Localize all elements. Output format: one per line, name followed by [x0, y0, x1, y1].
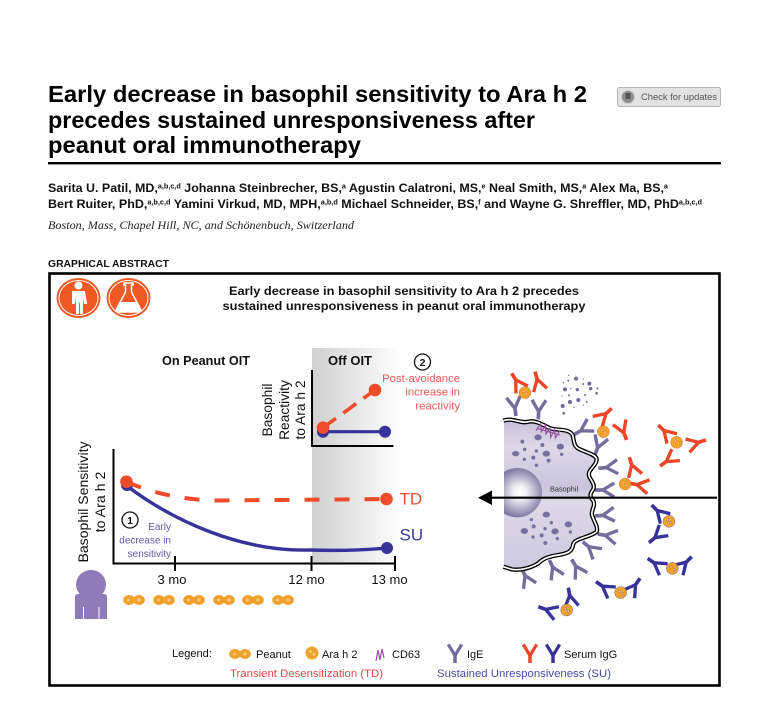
arrow: signal into cell	[478, 490, 717, 505]
marker 1	[122, 512, 138, 528]
legend: Peanut	[256, 649, 291, 661]
y axis title: Basophil Sensitivity	[76, 441, 92, 562]
peanut dosing row	[123, 595, 294, 605]
authors: a,b,c,d	[679, 200, 702, 206]
affiliations: Boston, Mass, Chapel Hill, NC, and Schönenbuch, Switzerland	[48, 220, 354, 232]
title: peanut oral immunotherapy	[48, 132, 361, 158]
TD curve	[120, 475, 393, 505]
callout: early decrease	[119, 522, 171, 560]
graphical abstract label: GRAPHICAL ABSTRACT	[48, 258, 170, 270]
icon: patient silhouette	[75, 570, 107, 619]
callout: post-avoidance increase: increase in	[405, 386, 460, 398]
authors: Johanna Steinbrecher, BS,	[181, 181, 342, 195]
marker 2: 2	[420, 357, 426, 369]
authors: a	[582, 184, 586, 190]
authors: Neal Smith, MS,	[486, 181, 582, 195]
marker 1: 1	[127, 515, 133, 527]
legend: transient desensitization: Transient Desensitization (TD)	[230, 668, 383, 680]
membrane	[503, 420, 597, 570]
inset y axis title	[260, 380, 308, 440]
basophil illustration	[493, 370, 708, 620]
inset y axis title: Basophil	[260, 384, 275, 436]
IgE receptors	[506, 396, 618, 589]
authors: Sarita U. Patil, MD,	[48, 181, 154, 195]
title: precedes sustained unresponsiveness after	[48, 107, 535, 133]
title: Early decrease in basophil sensitivity to Ara h 2	[48, 81, 587, 107]
granules	[512, 434, 572, 545]
legend: Legend:	[172, 648, 212, 660]
authors: f	[478, 200, 481, 206]
inset chart: basophil reactivity	[260, 370, 394, 446]
inset y axis title: Reactivity	[277, 380, 292, 440]
legend: CD63	[392, 649, 420, 661]
check for updates button	[618, 88, 720, 106]
callout: early decrease: sensitivity	[128, 549, 171, 560]
SU curve	[121, 479, 393, 554]
legend	[172, 644, 617, 663]
panel heading	[222, 284, 586, 313]
x axis labels: 13 mo	[371, 572, 408, 587]
label SU: SU	[400, 526, 423, 544]
cell body	[504, 420, 597, 570]
panel heading: sustained unresponsiveness in peanut oral immunotherapy	[222, 299, 586, 313]
callout: post-avoidance increase: reactivity	[415, 400, 460, 412]
page canvas	[48, 85, 721, 687]
legend: sustained unresponsiveness: Sustained Unresponsiveness (SU)	[437, 668, 611, 680]
label TD: TD	[400, 490, 422, 508]
authors: a	[664, 184, 668, 190]
blue IgG with Ara h 2 (SU)	[536, 500, 697, 620]
authors	[48, 181, 702, 211]
icon: flask	[106, 278, 150, 318]
inset y axis title: to Ara h 2	[293, 380, 308, 440]
released mediators	[561, 375, 598, 415]
panel: graphical abstract frame	[50, 274, 720, 686]
authors: Bert Ruiter, PhD,	[48, 197, 143, 211]
red IgG with Ara h 2 (TD)	[506, 370, 708, 494]
main chart: basophil sensitivity	[76, 441, 423, 587]
legend: IgE	[467, 649, 484, 661]
title	[48, 81, 587, 158]
y axis title: to Ara h 2	[93, 472, 109, 532]
off OIT shaded band	[312, 348, 402, 563]
authors: a,b,c,d	[147, 200, 170, 206]
callout: early decrease: decrease in	[119, 536, 171, 546]
authors: Agustin Calatroni, MS,	[346, 181, 482, 195]
heading: on peanut OIT: On Peanut OIT	[162, 354, 250, 368]
authors: a,b,d	[321, 200, 338, 206]
authors: Alex Ma, BS,	[586, 181, 664, 195]
heading: off OIT: Off OIT	[328, 354, 372, 368]
authors: e	[482, 184, 486, 190]
authors: and Wayne G. Shreffler, MD, PhD	[481, 197, 679, 211]
x axis labels: 3 mo	[158, 572, 186, 587]
y axis title	[76, 441, 109, 562]
callout: early decrease: Early	[148, 522, 171, 533]
marker 2	[414, 354, 430, 370]
icon: patient	[56, 278, 100, 318]
authors: Yamini Virkud, MD, MPH,	[170, 197, 321, 211]
authors: a	[342, 184, 346, 190]
legend: Ara h 2	[322, 649, 357, 661]
panel heading: Early decrease in basophil sensitivity to Ara h 2 precedes	[229, 284, 579, 298]
x axis labels: 12 mo	[288, 572, 325, 587]
callout: post-avoidance increase: Post-avoidance	[382, 373, 460, 385]
check for updates button: Check for updates	[641, 92, 718, 102]
authors: Michael Schneider, BS,	[338, 197, 478, 211]
authors: a,b,c,d	[158, 184, 181, 190]
cell label: Basophil	[550, 485, 578, 494]
callout: post-avoidance increase	[382, 373, 460, 412]
legend: Serum IgG	[564, 649, 617, 661]
nucleus	[504, 468, 542, 518]
CD63 markers	[536, 424, 560, 438]
x axis labels	[158, 572, 408, 587]
